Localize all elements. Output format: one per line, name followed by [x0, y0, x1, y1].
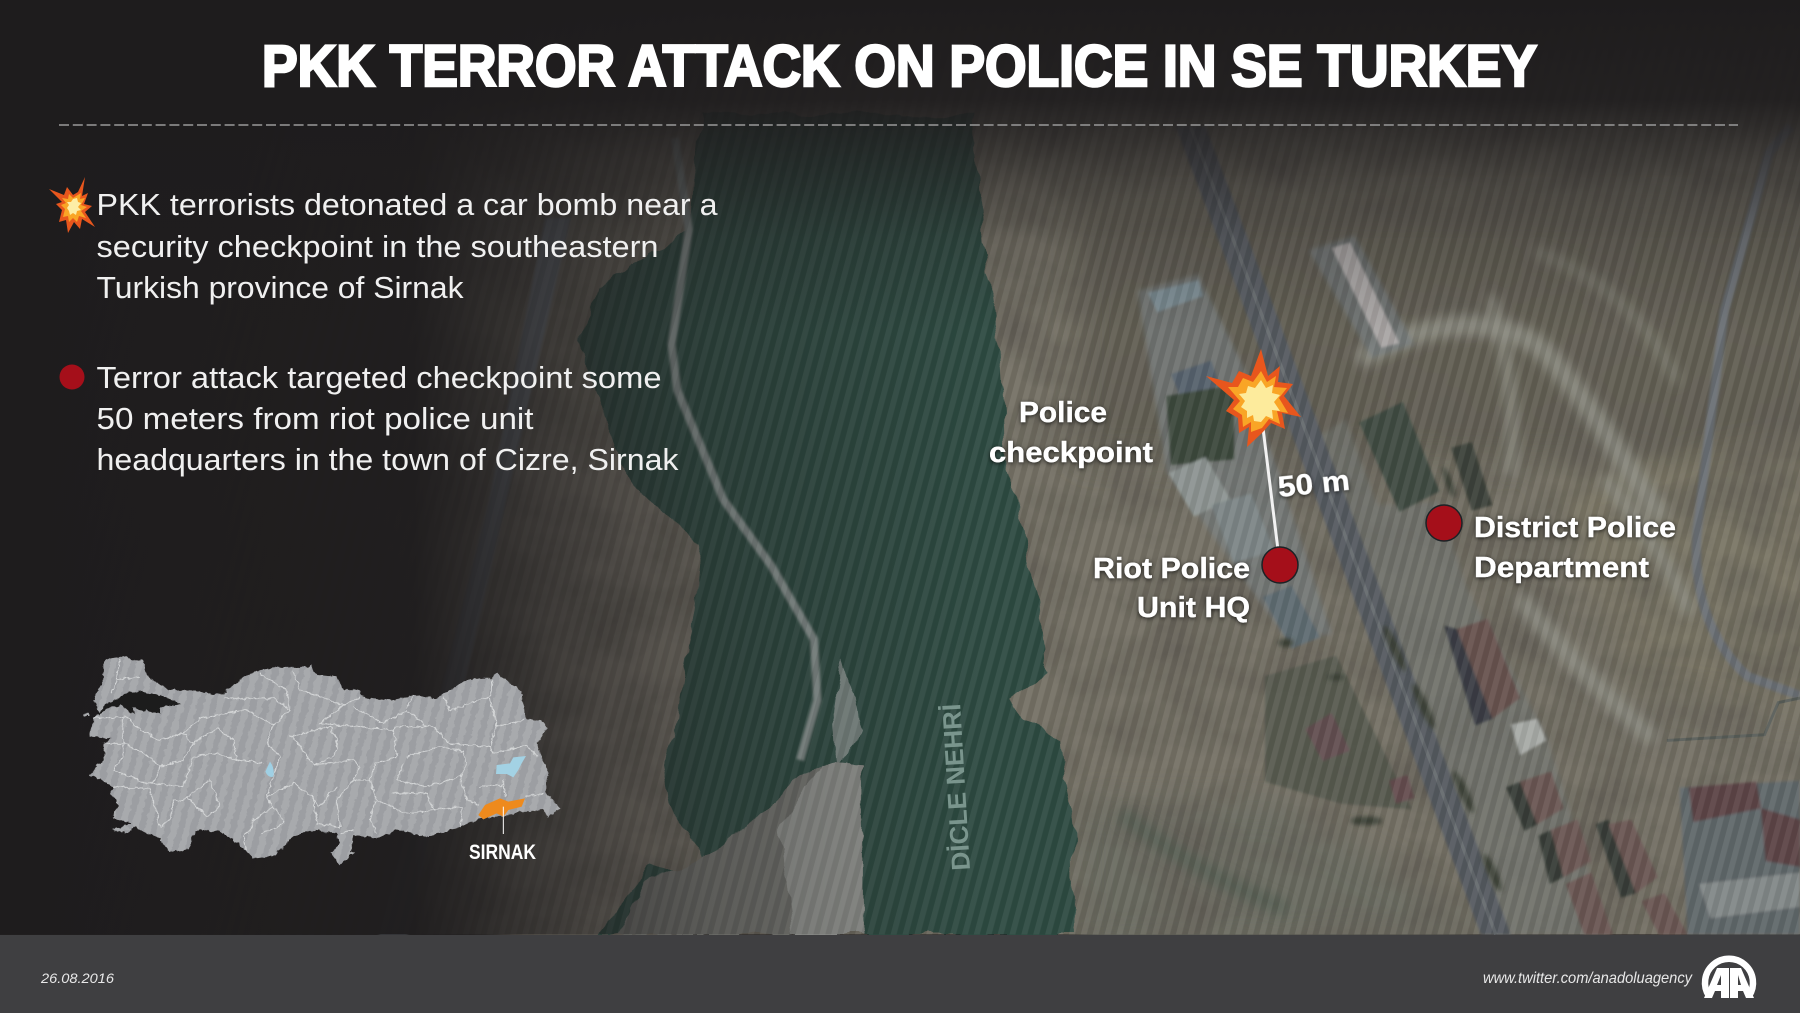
pale tracks: [1366, 253, 1688, 735]
title: PKK TERROR ATTACK ON POLICE IN SE TURKEY: [262, 34, 1537, 99]
compound east strip: [1320, 419, 1607, 934]
compound west: [1138, 274, 1332, 639]
icon: red dot: [60, 364, 84, 390]
sirnak province: [478, 798, 525, 819]
label: district police: Department: [1474, 552, 1649, 584]
satellite map background: [378, 105, 1800, 935]
text block: target: Terror attack targeted checkpoint some: [96, 360, 662, 395]
date: 26.08.2016: [40, 970, 114, 986]
islands: [83, 713, 132, 831]
sand bar: [620, 763, 863, 934]
buildings: [1148, 242, 1800, 934]
label: police checkpoint: Police: [1019, 397, 1107, 429]
marker: district police: [1426, 505, 1462, 541]
label: police checkpoint: [989, 397, 1153, 469]
right curved road: [1696, 126, 1800, 696]
main road: [1176, 126, 1511, 934]
pad around long building: [1309, 235, 1414, 358]
label: police checkpoint: checkpoint: [989, 437, 1153, 469]
logo: AA: [1704, 959, 1754, 998]
text block: target: headquarters in the town of Cizre, Sirnak: [96, 442, 679, 477]
label: sirnak: SIRNAK: [469, 841, 536, 864]
marker: riot police: [1262, 547, 1298, 583]
label: 50 m: 50 m: [1276, 465, 1351, 504]
label: riot police: [1093, 553, 1250, 624]
text block: car bomb: PKK terrorists detonated a car bomb near a: [96, 187, 718, 222]
url: www.twitter.com/anadoluagency: [1483, 970, 1693, 987]
locator map: Turkey: [83, 656, 560, 865]
text block: target: [60, 360, 679, 477]
icon: explosion at checkpoint: [1206, 349, 1301, 447]
label: district police: District Police: [1474, 512, 1676, 544]
text block: car bomb: Turkish province of Sirnak: [96, 270, 464, 305]
stripes: [738, 227, 1800, 934]
text block: car bomb: security checkpoint in the southeastern: [96, 229, 658, 264]
lake tuz: [265, 762, 274, 777]
left dark fade: [0, 105, 867, 934]
label: riot police: Riot Police: [1093, 553, 1250, 585]
text block: target: 50 meters from riot police unit: [96, 401, 534, 436]
lake van: [496, 756, 526, 777]
text block: car bomb: [49, 177, 718, 305]
river label: DİCLE NEHRİ: [936, 703, 976, 871]
tree clusters: [1278, 466, 1505, 893]
causeway: [672, 138, 817, 760]
label: riot police: Unit HQ: [1137, 592, 1250, 624]
top dark fade: [440, 0, 1800, 306]
distance line: [1263, 428, 1278, 550]
left road: [379, 218, 571, 934]
river water: [580, 115, 1073, 934]
icon: small explosion: [49, 177, 95, 233]
label: district police: [1474, 512, 1676, 584]
footer bar: [0, 935, 1800, 1013]
